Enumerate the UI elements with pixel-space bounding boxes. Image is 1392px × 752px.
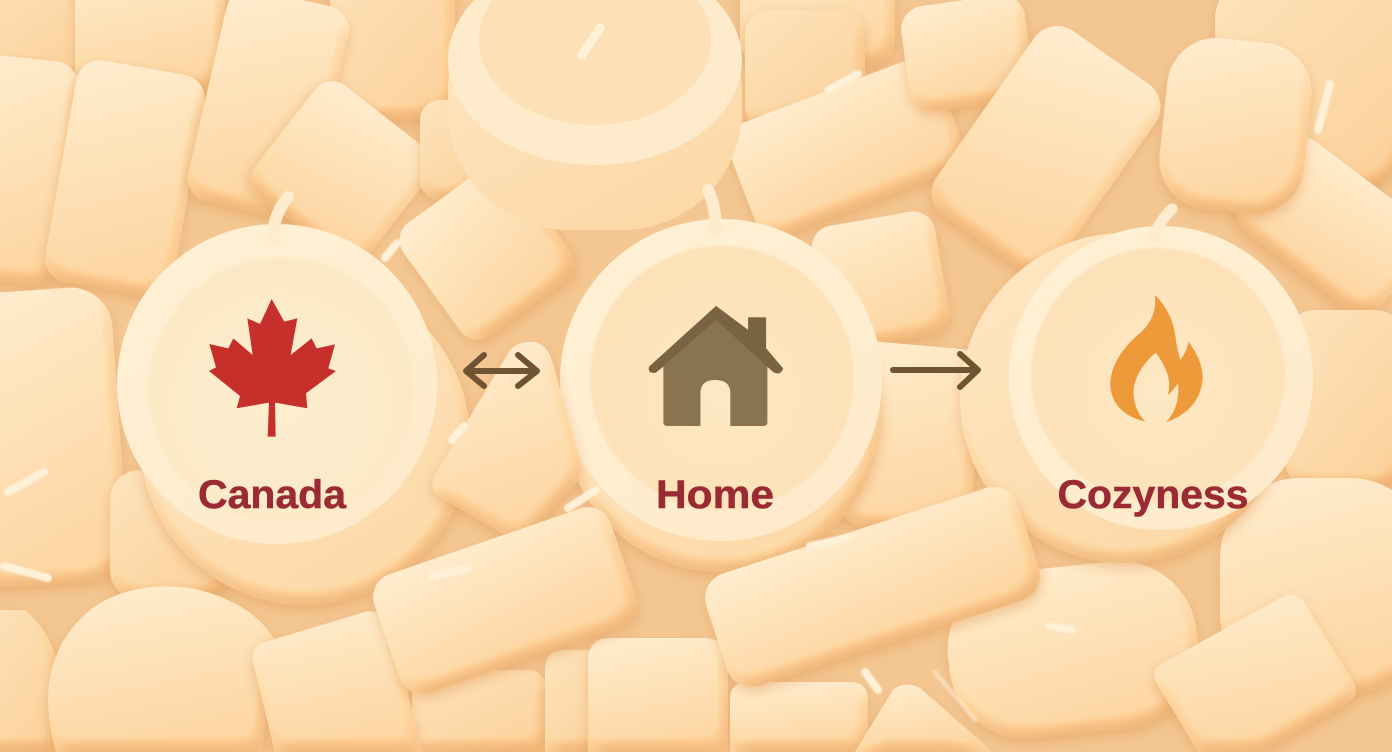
icon: maple leaf <box>209 299 336 437</box>
candle: Cozyness <box>960 209 1313 563</box>
icon: house <box>649 306 783 426</box>
candle: Home <box>560 190 882 572</box>
candle top rim <box>560 219 882 541</box>
candle top rim <box>1009 226 1313 530</box>
background: large candle, top centre <box>448 0 742 230</box>
background: wax pieces in front of candle bodies <box>367 342 1047 700</box>
arrow: double-headed Canada to Home <box>466 355 537 386</box>
label: Canada: Canada <box>198 473 347 517</box>
wick <box>1153 209 1172 238</box>
wick <box>708 190 716 230</box>
icon: flame <box>1110 295 1203 422</box>
wick <box>273 197 288 238</box>
candle top face <box>1031 248 1285 502</box>
candle: Canada <box>117 197 470 605</box>
label: Cozyness: Cozyness <box>1058 473 1248 517</box>
candle body <box>960 233 1290 563</box>
candle top face <box>590 246 854 510</box>
background: wicks on front pieces <box>432 426 848 576</box>
label: Home: Home <box>656 473 774 517</box>
candle body <box>562 252 882 572</box>
candle top rim <box>117 224 437 544</box>
arrow: Home to Cozyness <box>893 354 978 387</box>
candle top face <box>148 257 414 523</box>
candle body <box>140 275 470 605</box>
